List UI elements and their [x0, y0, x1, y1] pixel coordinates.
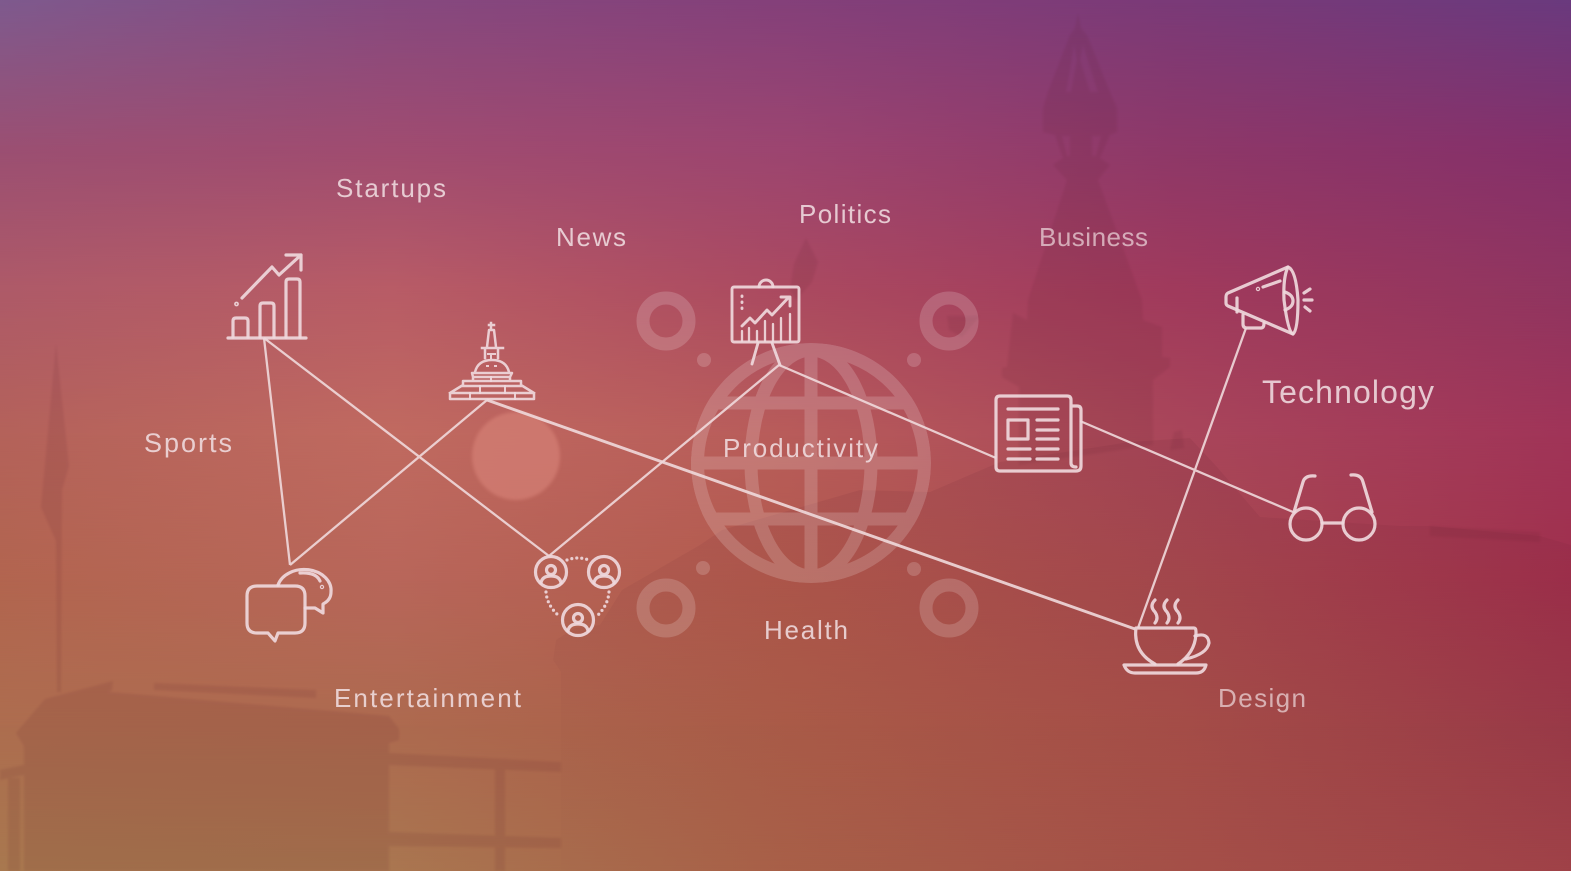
silhouette: tower [1002, 13, 1170, 465]
silhouette: bird and statue [790, 238, 1184, 450]
icon: newspaper [996, 396, 1081, 471]
silhouette: left building [16, 681, 399, 871]
icons [228, 255, 1375, 673]
icon: people network [536, 556, 620, 636]
label: Sports: Sports [144, 428, 232, 458]
sun glow [472, 412, 560, 500]
icon: glasses [1290, 475, 1375, 540]
icon: stupa [450, 323, 534, 399]
icon: megaphone [1226, 267, 1312, 334]
silhouette: temple roofline [553, 438, 1571, 871]
icon: bar chart [228, 255, 306, 338]
label: Technology: Technology [1262, 374, 1434, 410]
label: Startups: Startups [336, 173, 446, 203]
globe emblem [643, 298, 972, 631]
label: Politics: Politics [799, 199, 891, 229]
silhouette: railings [0, 526, 1540, 871]
label: Design: Design [1218, 683, 1306, 713]
decorative dots [696, 353, 921, 576]
label: Health: Health [764, 615, 848, 645]
icon: presentation board [732, 280, 799, 365]
icon: chat bubbles [247, 569, 331, 641]
labels [144, 173, 1434, 713]
label: News: News [556, 222, 626, 252]
decorative rings [643, 298, 972, 631]
connecting lines [264, 328, 1293, 629]
icon: coffee cup [1124, 600, 1209, 673]
label: Productivity: Productivity [723, 433, 878, 463]
globe [690, 345, 930, 582]
label: Business: Business [1039, 222, 1148, 252]
label: Entertainment: Entertainment [334, 683, 522, 713]
silhouette: roof panel [154, 683, 316, 698]
silhouette: flag and pole [41, 344, 69, 692]
